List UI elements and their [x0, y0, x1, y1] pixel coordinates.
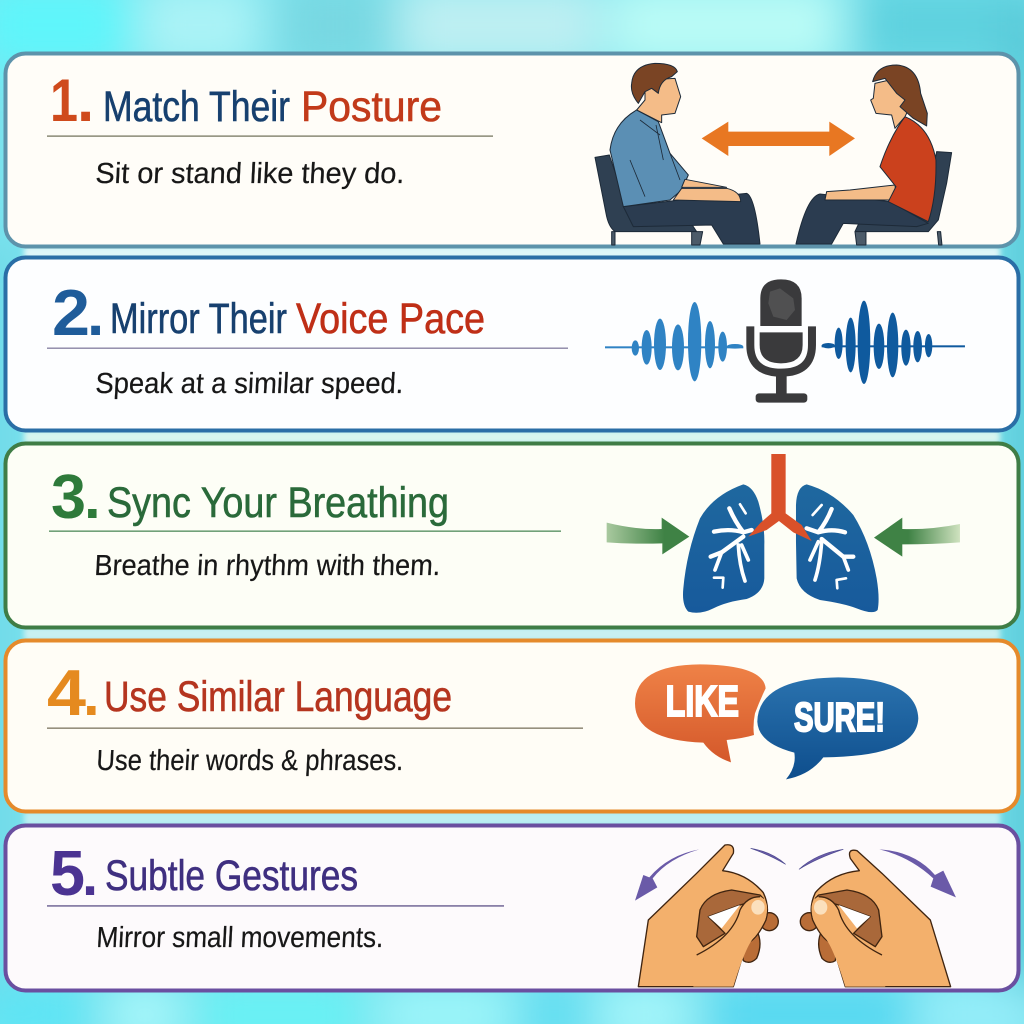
illustration: microphone with sound waves: [605, 279, 965, 403]
panel 4: use similar language: [6, 640, 1018, 812]
heading 2: 2: [52, 276, 90, 349]
panel 3: sync your breathing: [6, 444, 1018, 628]
description 4: Use their words & phrases.: [96, 745, 404, 777]
description 3: Breathe in rhythm with them.: [94, 550, 441, 582]
trachea: [748, 454, 812, 541]
heading 2: Voice Pace: [296, 295, 485, 343]
heading 4: 4: [47, 656, 86, 729]
description 1: Sit or stand like they do.: [95, 158, 405, 190]
man seated on chair: [595, 63, 760, 245]
heading 5: 5: [50, 837, 85, 909]
left sound wave: [605, 302, 743, 381]
illustration: speech bubbles: [635, 664, 918, 779]
arrow: inward from left: [607, 518, 689, 554]
description 2: Speak at a similar speed.: [95, 368, 404, 400]
heading 1: .: [77, 66, 94, 135]
heading 2: .: [87, 280, 104, 349]
heading 1: Posture: [301, 83, 442, 131]
description 5: Mirror small movements.: [96, 922, 384, 954]
arrow: double-headed orange: [702, 122, 855, 156]
heading 3: 3: [51, 463, 86, 532]
heading 1: Match Their: [103, 83, 290, 131]
heading 3: Sync Your Breathing: [107, 479, 449, 527]
speech bubble: SURE!: [757, 677, 918, 779]
illustration: two people seated facing each other: [595, 63, 952, 245]
left hand: [638, 845, 778, 987]
speech bubble: LIKE: [635, 664, 766, 762]
heading 4: [47, 656, 452, 729]
right sound wave: [822, 301, 965, 384]
right hand: [800, 850, 951, 987]
heading 5: Subtle Gestures: [105, 852, 358, 900]
heading 3: .: [84, 464, 101, 531]
speech bubble: SURE!: SURE!: [794, 694, 885, 740]
bronchi branches: [711, 504, 853, 588]
woman seated on chair: [796, 65, 952, 245]
heading 4: .: [83, 661, 100, 728]
panel 2: mirror their voice pace: [6, 258, 1018, 430]
arrow: inward from right: [874, 518, 960, 557]
heading 1: [50, 66, 442, 135]
heading 5: [50, 837, 358, 909]
illustration: mirrored hands with motion arrows: [635, 845, 956, 987]
heading 1: 1: [50, 67, 78, 134]
illustration: lungs with inward arrows: [607, 454, 960, 613]
heading 2: [52, 276, 485, 349]
heading 5: .: [82, 843, 98, 908]
motion arrows: [635, 848, 956, 901]
microphone: [750, 279, 812, 403]
panel 5: subtle gestures: [6, 826, 1018, 990]
lungs: [683, 484, 879, 613]
heading 4: Use Similar Language: [104, 673, 452, 721]
panel 1: match their posture: [6, 54, 1018, 246]
speech bubble: LIKE: LIKE: [666, 678, 739, 726]
heading 2: Mirror Their: [110, 295, 287, 343]
heading 3: [51, 463, 449, 532]
